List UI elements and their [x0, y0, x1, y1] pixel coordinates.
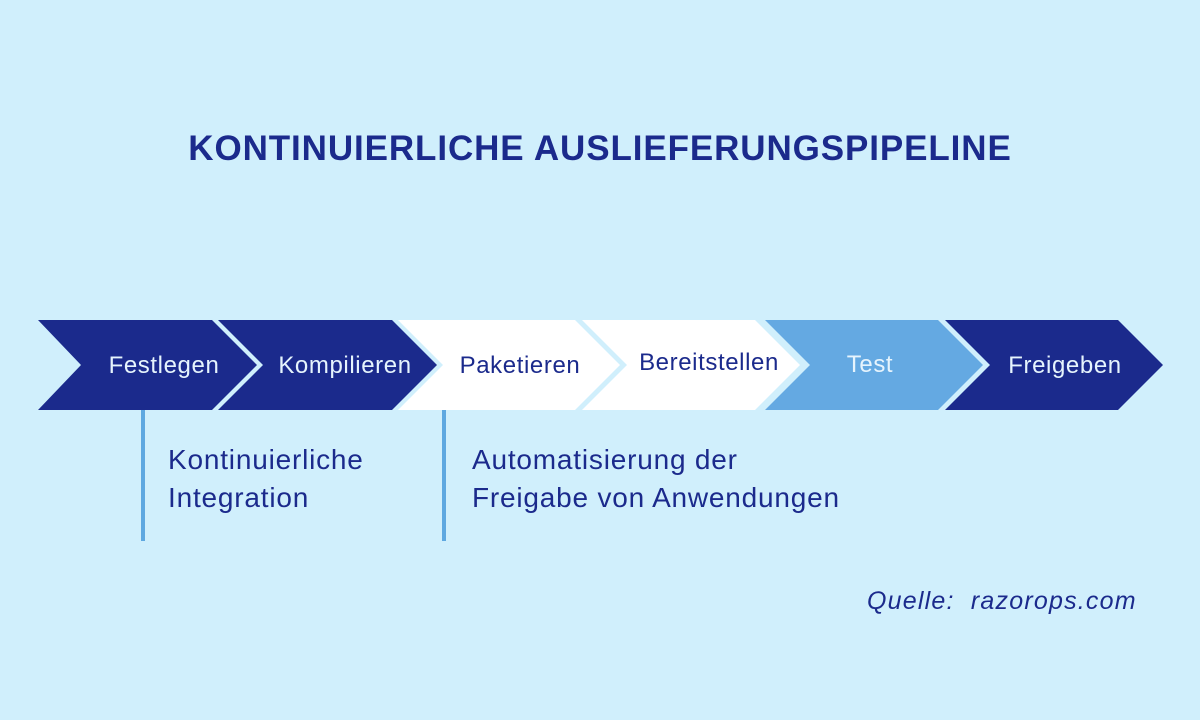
text: Kontinuierliche Integration: Integration	[168, 482, 309, 513]
chevron: Freigeben	[945, 320, 1163, 410]
text: Automatisierung: Freigabe von Anwendungen	[472, 482, 840, 513]
chevron: Kompilieren	[218, 320, 437, 410]
bracket line: release automation	[442, 410, 446, 541]
chevron: Bereitstellen: Bereitstellen	[639, 349, 779, 376]
chevron: Festlegen	[38, 320, 257, 410]
chevron: Test: Test	[847, 351, 893, 378]
text: Automatisierung: Automatisierung der	[472, 444, 738, 475]
chevron: Freigeben: Freigeben	[1008, 352, 1122, 379]
chevron: Paketieren: Paketieren	[460, 352, 580, 379]
chevron: Festlegen: Festlegen	[109, 352, 219, 379]
chevron: Test	[765, 320, 983, 410]
bracket line: CI	[141, 410, 145, 541]
text: Automatisierung	[472, 444, 840, 513]
text: Kontinuierliche Integration: Kontinuierliche	[168, 444, 364, 475]
source: Quelle: razorops.com	[867, 587, 1137, 615]
chevron: Kompilieren: Kompilieren	[278, 352, 412, 379]
title: KONTINUIERLICHE AUSLIEFERUNGSPIPELINE	[188, 129, 1012, 168]
chevron: Bereitstellen	[582, 320, 800, 410]
text: Kontinuierliche Integration	[168, 444, 364, 513]
chevron: Paketieren	[398, 320, 620, 410]
